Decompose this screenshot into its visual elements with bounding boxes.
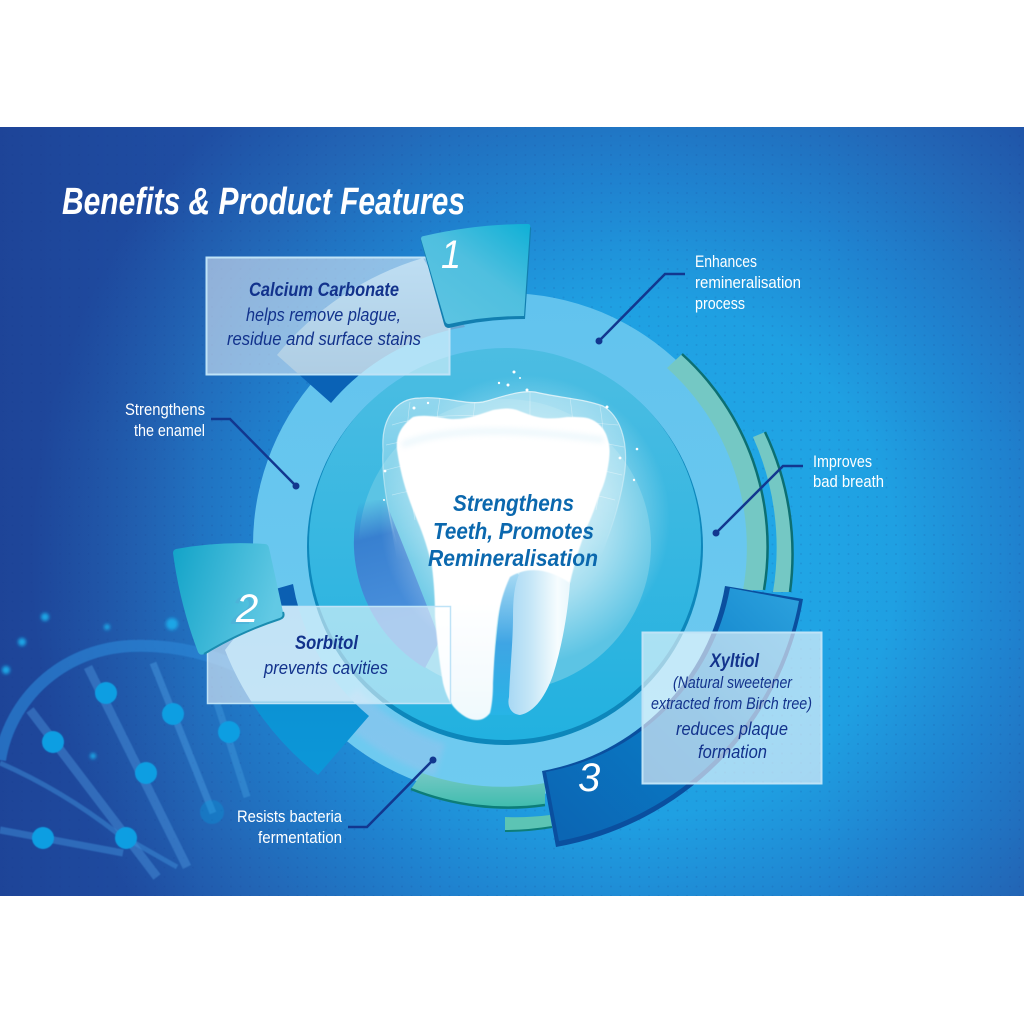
callout box: Calcium Carbonate: helps remove plague, bbox=[246, 304, 401, 325]
callout box: Xyltiol: extracted from Birch tree) bbox=[651, 695, 812, 713]
callout box: Calcium Carbonate bbox=[206, 258, 450, 374]
blue swoosh in disc bbox=[354, 500, 440, 668]
center caption: Teeth, Promotes bbox=[433, 518, 594, 544]
crown shading bbox=[402, 431, 604, 445]
tile 2 with number bbox=[173, 543, 284, 655]
pale inner disc bbox=[359, 399, 651, 691]
label: Improves bad breath: Improves bbox=[813, 453, 872, 471]
label: Enhances remineralisation process: Enhances bbox=[695, 253, 757, 271]
callout box: Sorbitol: Sorbitol bbox=[295, 633, 359, 654]
label: Enhances remineralisation process: process bbox=[695, 295, 745, 313]
segment 2 wedge bbox=[225, 584, 369, 775]
glow behind tooth bbox=[380, 375, 670, 665]
tooth body bbox=[397, 408, 610, 720]
bottom arc 2 bbox=[505, 815, 552, 831]
central circular diagram bbox=[253, 293, 757, 797]
tooth mesh halo bbox=[383, 392, 626, 560]
callout box: Sorbitol bbox=[208, 606, 450, 704]
callout box: Xyltiol bbox=[642, 632, 822, 784]
segment 3 wedge bbox=[542, 586, 803, 847]
outer-right arc 2 bbox=[753, 432, 793, 592]
center caption: Strengthens bbox=[453, 490, 574, 516]
callout box: Calcium Carbonate: Calcium Carbonate bbox=[249, 280, 399, 301]
green arcs bbox=[411, 354, 793, 831]
tile 2 with number: 2 bbox=[235, 587, 258, 631]
tile 2 with number: 2 bbox=[230, 589, 253, 633]
tile 1 with number bbox=[421, 224, 531, 328]
callout box: Xyltiol: reduces plaque bbox=[676, 718, 788, 739]
label: Improves bad breath bbox=[712, 453, 884, 536]
label: Resists bacteria fermentation: Resists bacteria bbox=[237, 808, 343, 826]
label: Resists bacteria fermentation: fermentation bbox=[258, 829, 342, 847]
label: Improves bad breath: bad breath bbox=[813, 473, 884, 491]
number 3: 3 bbox=[578, 756, 600, 800]
tooth root gap bbox=[488, 571, 525, 715]
ring lower lavender tint bbox=[345, 700, 440, 760]
center caption: Remineralisation bbox=[428, 545, 598, 571]
title: Benefits & Product Features bbox=[62, 181, 465, 223]
label: Enhances remineralisation process bbox=[596, 253, 801, 344]
outer ring bbox=[253, 293, 757, 797]
label: Strengthens the enamel: Strengthens bbox=[125, 401, 205, 419]
inner disc shadow bbox=[307, 349, 703, 745]
center caption bbox=[428, 490, 598, 571]
tile 1 with number: 1 bbox=[441, 233, 461, 277]
background band bbox=[0, 127, 1024, 896]
right root bbox=[508, 569, 570, 715]
callout box: Xyltiol: Xyltiol bbox=[709, 651, 760, 672]
callout box: Xyltiol: formation bbox=[698, 741, 767, 762]
label: Resists bacteria fermentation bbox=[237, 756, 436, 847]
label: Strengthens the enamel: the enamel bbox=[134, 422, 205, 440]
sparkles bbox=[383, 370, 638, 501]
tooth bbox=[383, 370, 638, 720]
bottom arc 1 bbox=[411, 773, 545, 808]
DNA helix illustration bbox=[0, 613, 250, 877]
callout box: Calcium Carbonate: residue and surface stains bbox=[227, 328, 421, 349]
segment 1 wedge bbox=[277, 258, 465, 403]
inner disc bbox=[309, 348, 701, 740]
outer-right arc 1 bbox=[667, 354, 768, 590]
label: Enhances remineralisation process: remineralisation bbox=[695, 274, 801, 292]
callout box: Sorbitol: prevents cavities bbox=[263, 657, 388, 678]
callout box: Xyltiol: (Natural sweetener bbox=[673, 674, 793, 692]
label: Strengthens the enamel bbox=[125, 401, 300, 490]
